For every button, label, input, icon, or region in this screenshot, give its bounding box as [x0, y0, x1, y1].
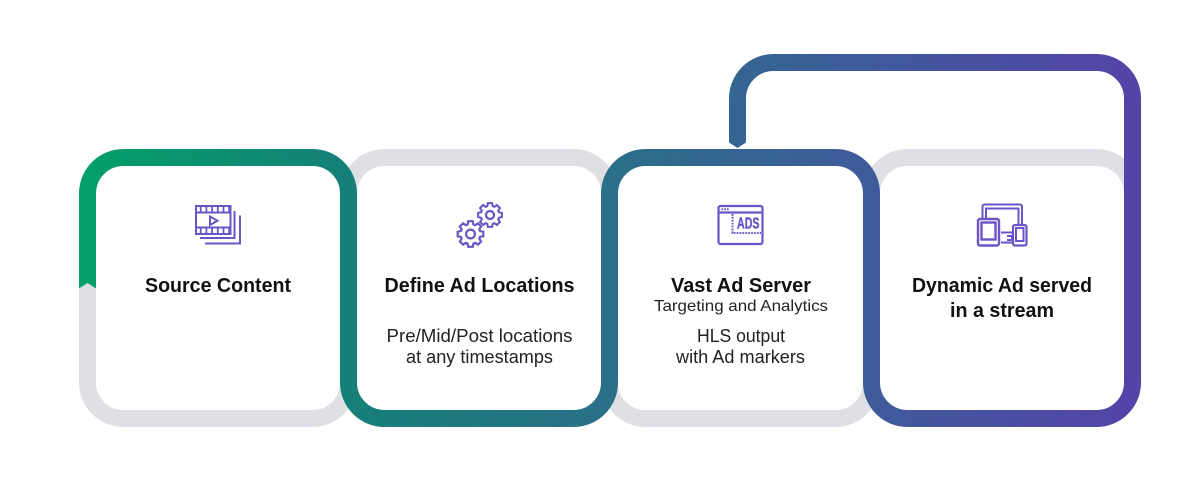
text: hls output description: with Ad markers: [675, 347, 805, 367]
icon: ads window: [718, 206, 762, 244]
card 3: vast ad server: [654, 206, 828, 367]
heading: dynamic ad served in a stream: in a stream: [950, 300, 1054, 322]
heading: define ad locations: Define Ad Locations: [384, 275, 574, 297]
icon: gears: [458, 203, 502, 247]
grey card outlines: [88, 158, 1132, 418]
card 2: define ad locations: [384, 203, 574, 367]
icon: ads window: ADS: [737, 216, 760, 232]
card 1: source content: [145, 206, 291, 297]
subheading: targeting and analytics: Targeting and Analytics: [654, 298, 828, 315]
heading: dynamic ad served in a stream: Dynamic Ad served: [912, 275, 1092, 297]
text: hls output description: HLS output: [697, 326, 785, 346]
card 4: dynamic ad served: [912, 204, 1092, 322]
text: locations description: at any timestamps: [406, 347, 553, 367]
heading: vast ad server: Vast Ad Server: [671, 275, 811, 297]
icon: film stack: [196, 206, 240, 244]
gradient flow line: [79, 62, 1132, 418]
heading: dynamic ad served in a stream: [912, 275, 1092, 322]
heading: source content: Source Content: [145, 275, 291, 297]
text: hls output description: [675, 326, 805, 367]
icon: devices: [978, 204, 1026, 246]
text: locations description: [386, 326, 572, 367]
text: locations description: Pre/Mid/Post locations: [386, 326, 572, 346]
